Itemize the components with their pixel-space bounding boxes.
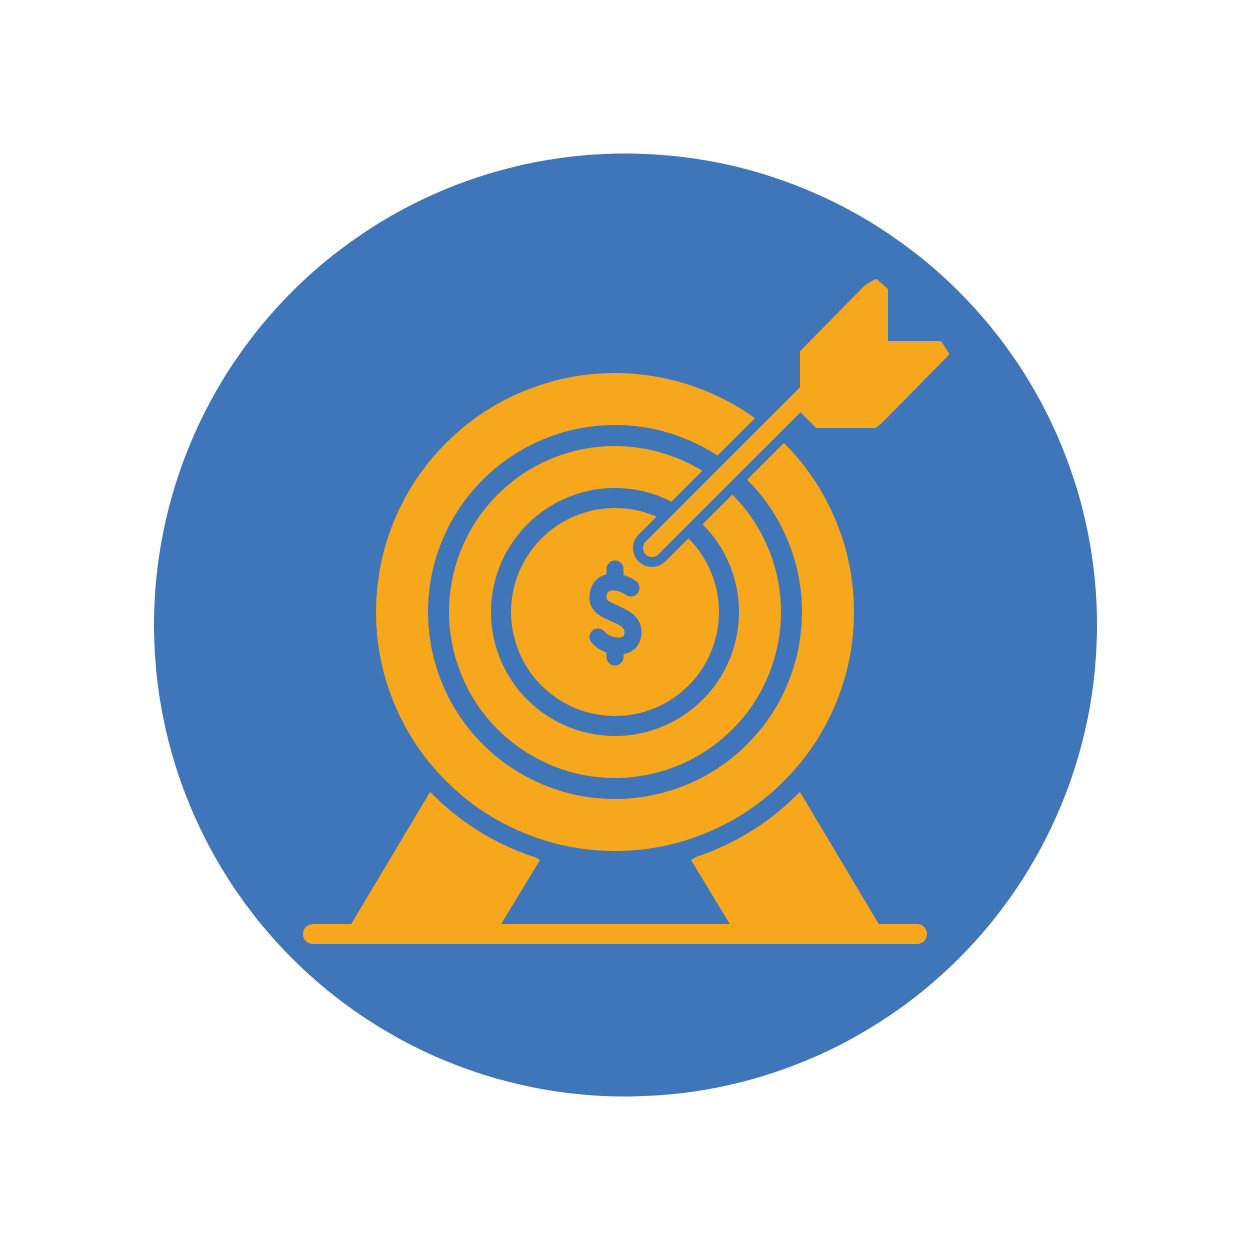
arrow bbox=[652, 281, 947, 548]
target rings bbox=[402, 399, 828, 825]
dollar sign bbox=[598, 569, 633, 657]
background circle bbox=[154, 154, 1097, 1096]
stand bbox=[313, 792, 917, 934]
